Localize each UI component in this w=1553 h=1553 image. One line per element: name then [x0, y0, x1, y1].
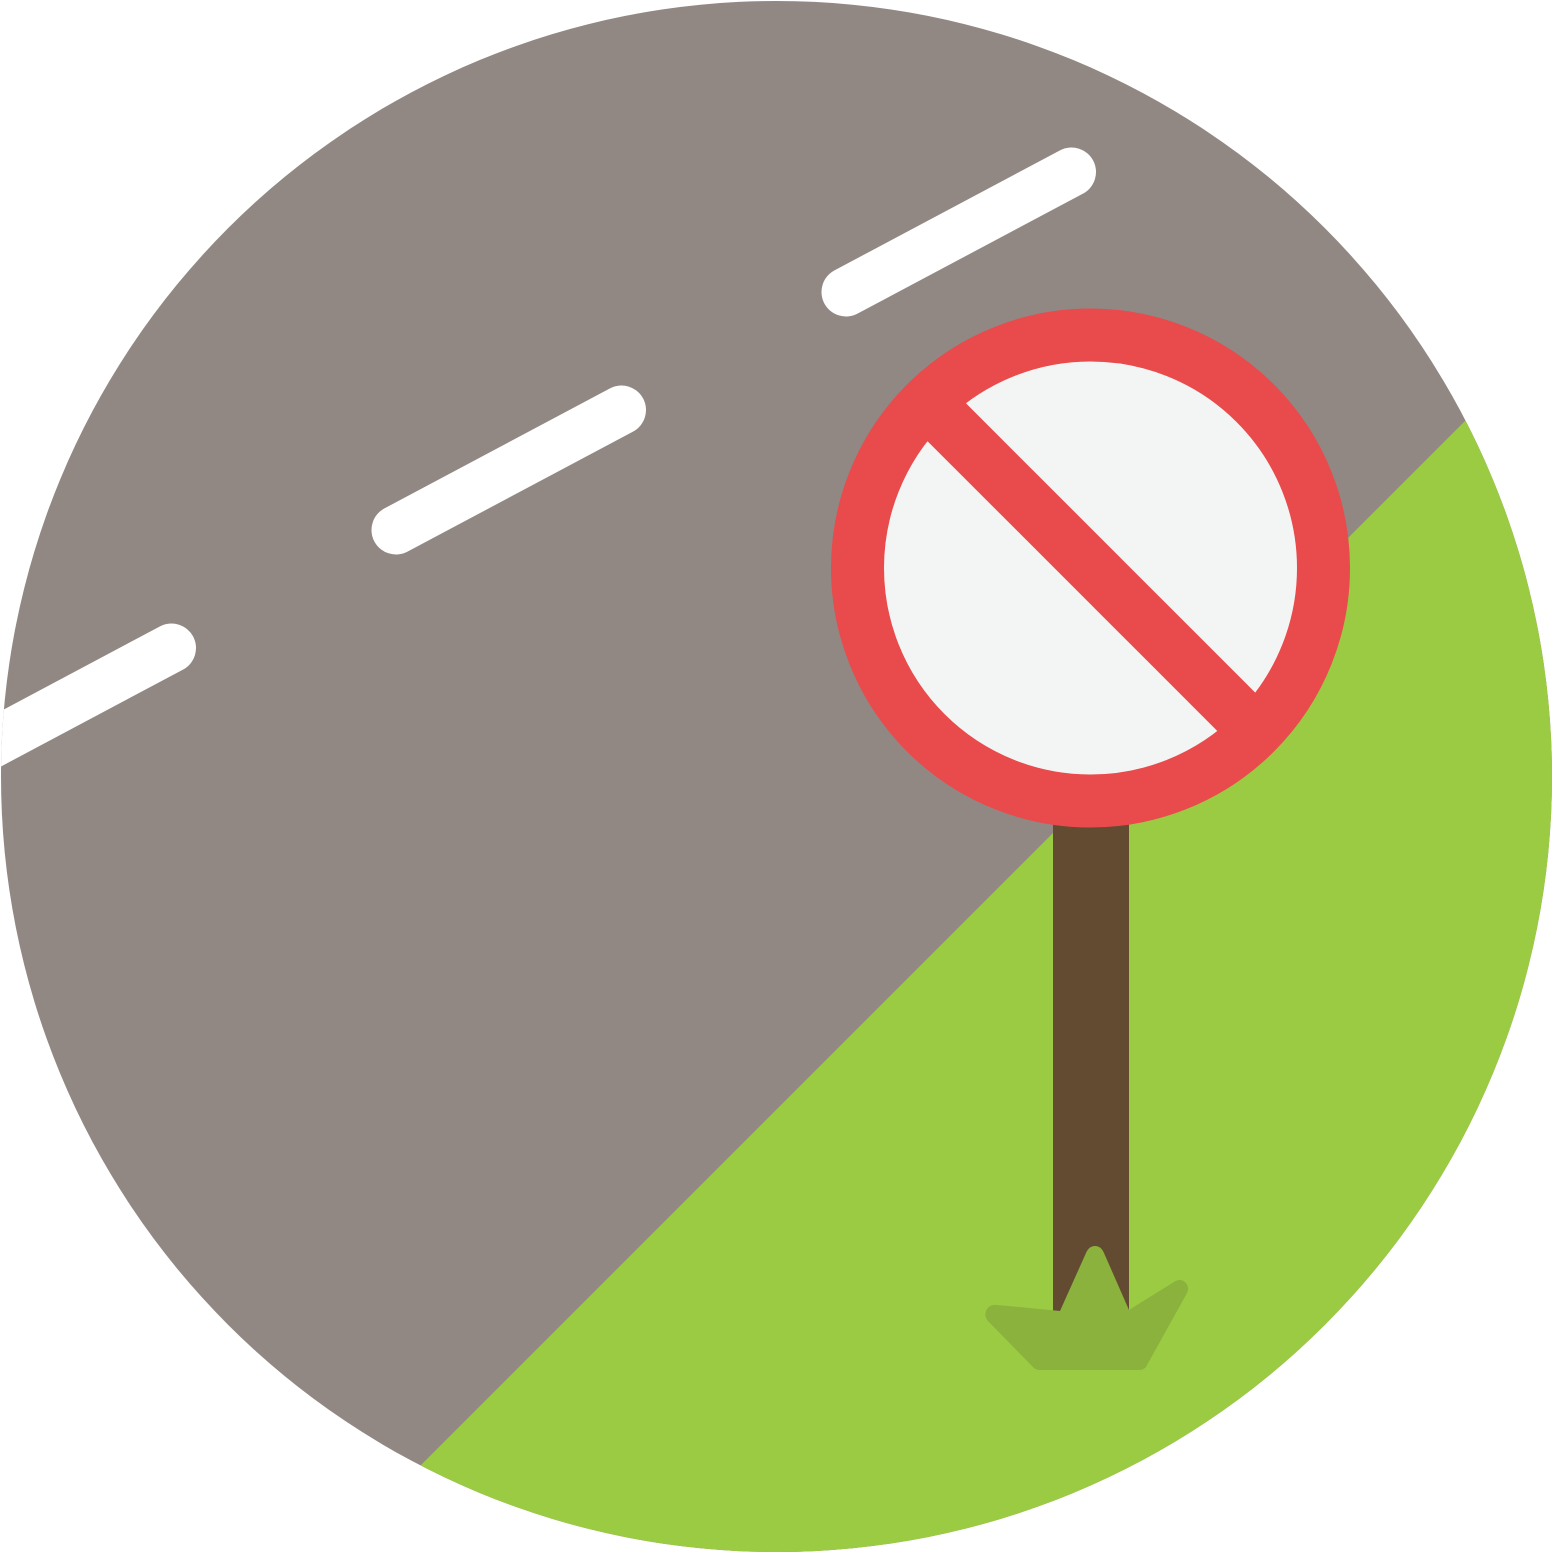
lane mark: middle: [396, 410, 622, 530]
icon: grass tuft: [985, 1246, 1188, 1370]
grass area: [420, 420, 1552, 1552]
sign diagonal bar: [925, 400, 1256, 732]
lane mark: top: [846, 172, 1072, 292]
sign ring: [858, 335, 1324, 801]
sign face: [858, 335, 1324, 801]
icon: prohibition sign: [858, 335, 1324, 801]
road lane markings: [0, 172, 1072, 768]
icon: sign post: [1053, 800, 1129, 1330]
lane mark: bottom: [0, 648, 172, 768]
